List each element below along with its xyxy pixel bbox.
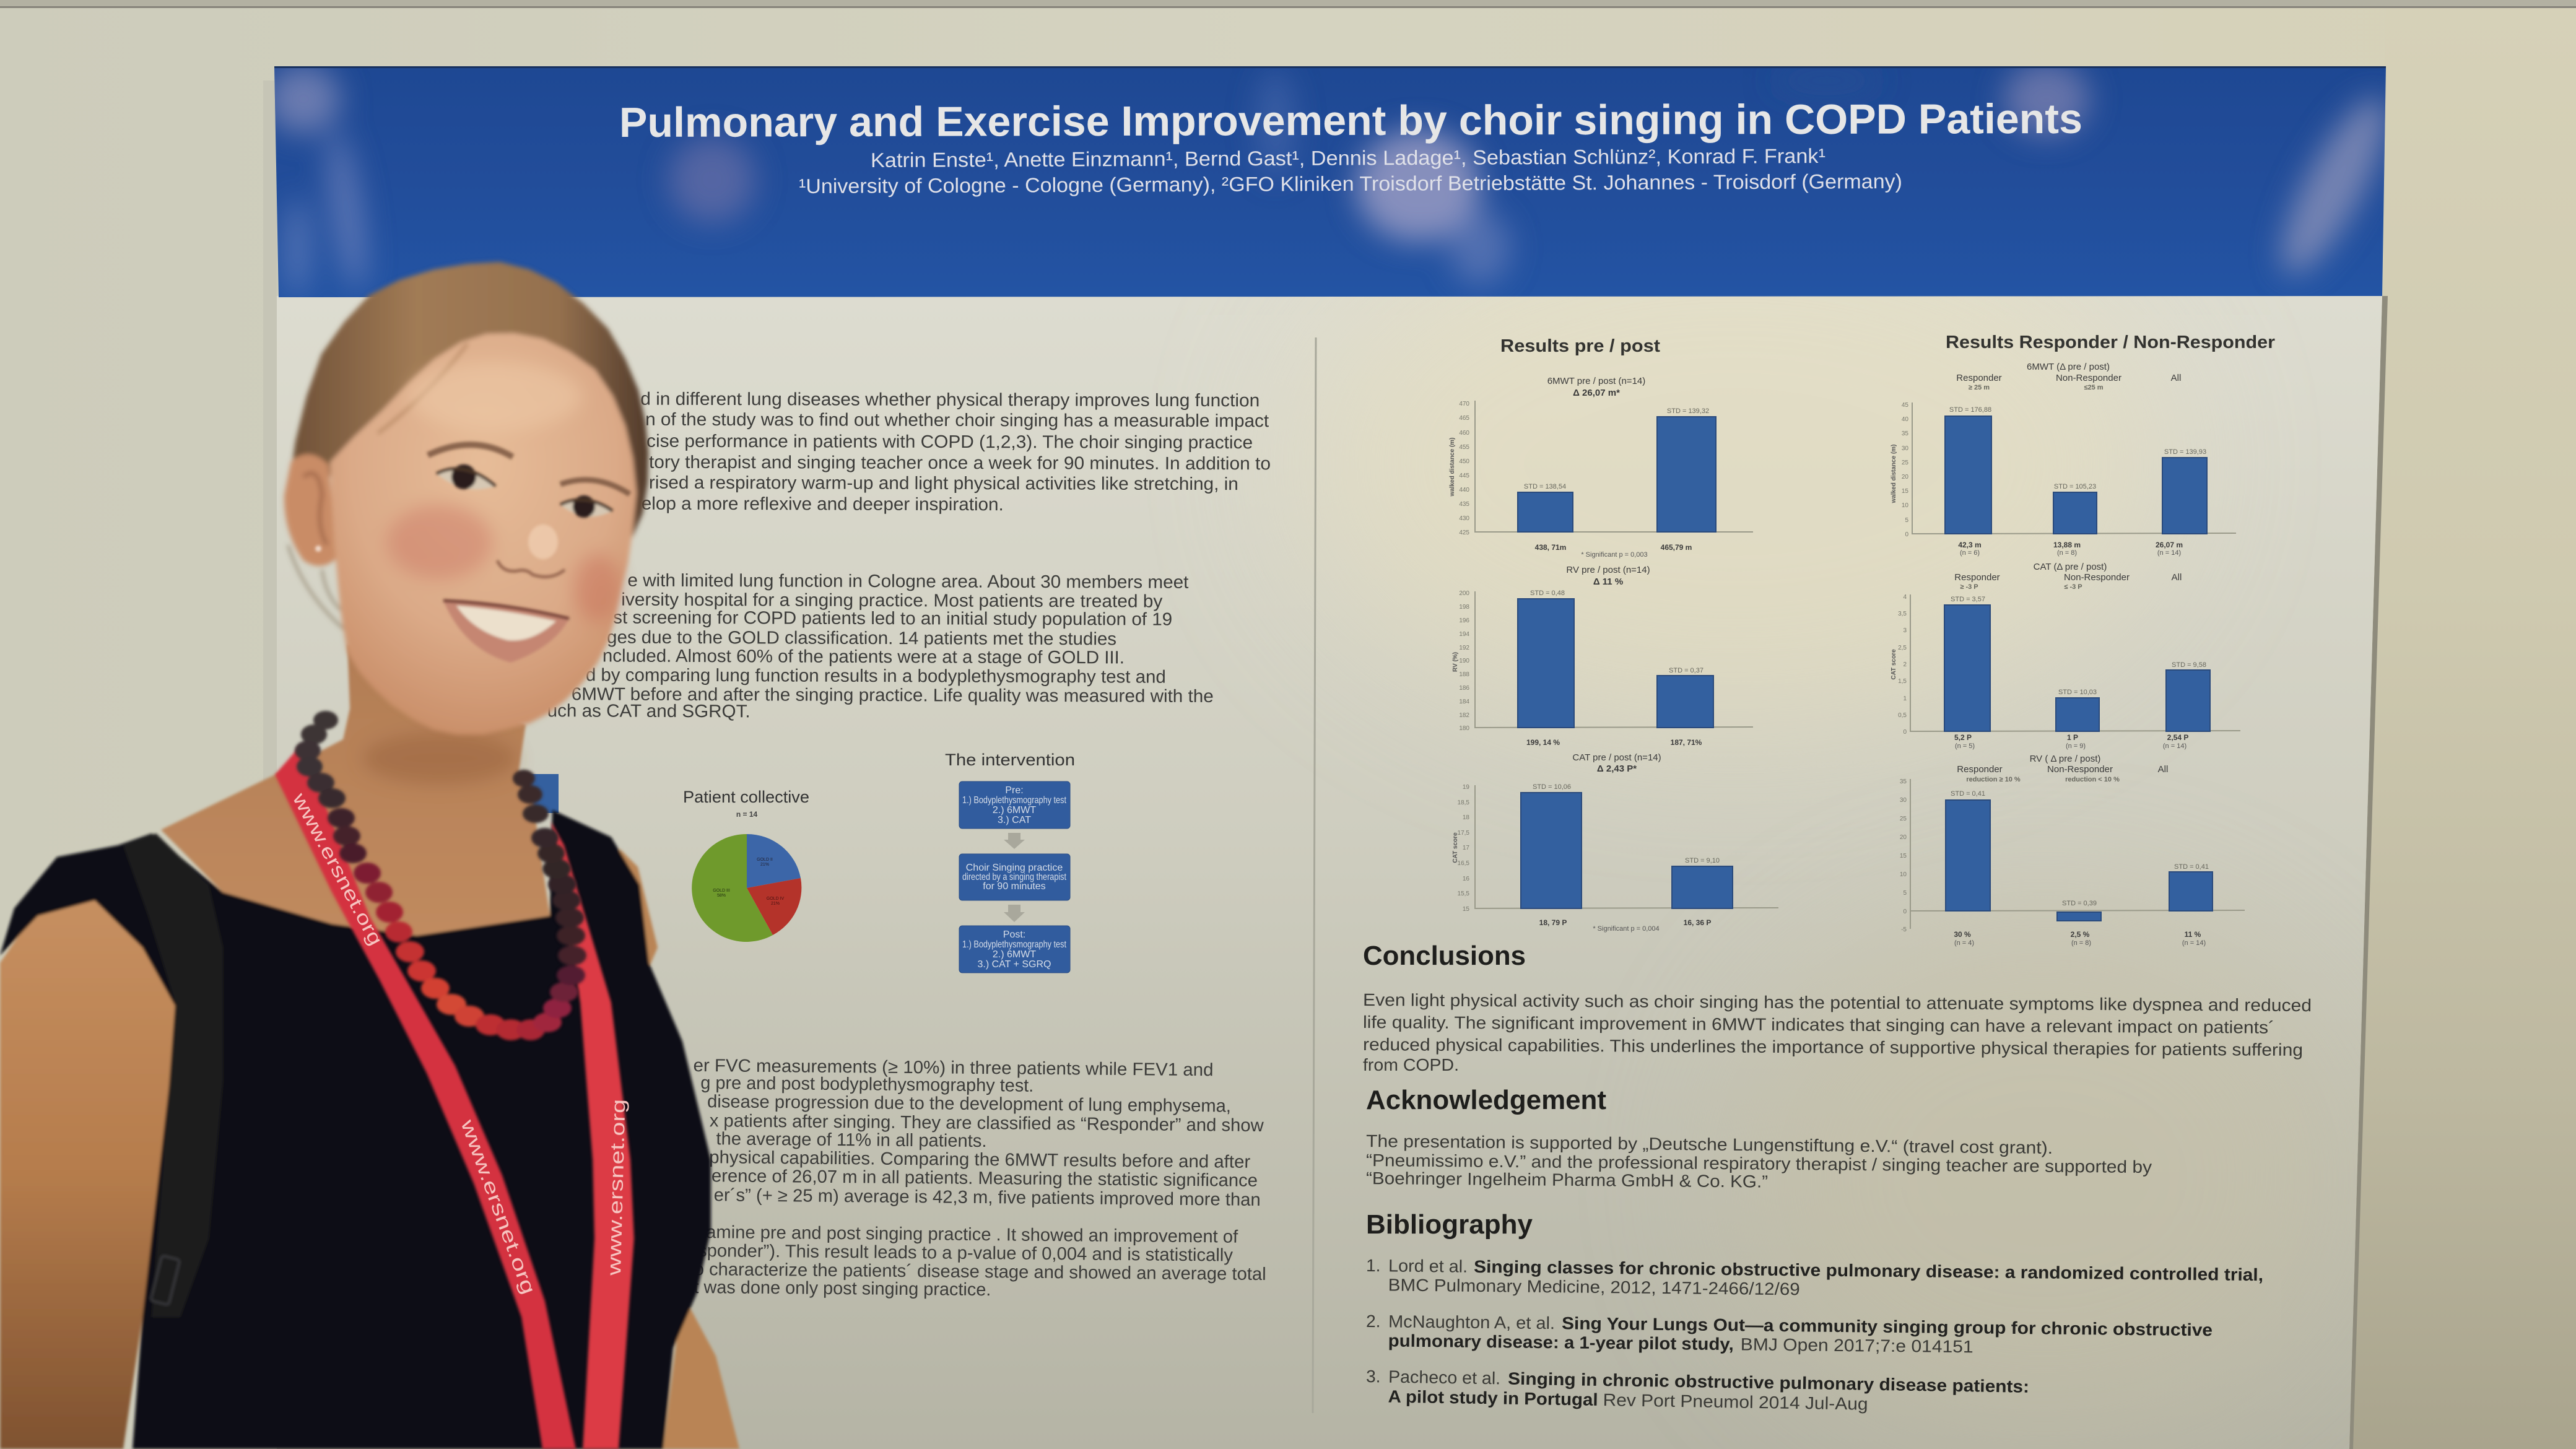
chart: 6MWT responder: Responder (1956, 373, 2002, 383)
chart: 6MWT pre/post: 438, 71m (1535, 543, 1566, 552)
chart: 6MWT responder: 20 (1902, 474, 1908, 481)
reference 1: BMC Pulmonary Medicine, 2012, 1471-2466/12/69 (1388, 1275, 1800, 1299)
step: choir practice: for 90 minutes (983, 881, 1046, 892)
chart: 6MWT responder: STD = 105,23 (2054, 483, 2096, 490)
conclusions section: Even light physical activity such as choir singing has the potential to attenuate symptoms like dyspnea and reduced (1363, 990, 2312, 1015)
patient collective pie chart (683, 788, 809, 942)
chart: RV responder: reduction ≥ 10 % (1966, 776, 2021, 783)
conclusions section (1363, 941, 2312, 1074)
reference 2: McNaughton A, et al. (1388, 1312, 1555, 1333)
results text: sponder”). This result leads to a p-value of 0,004 and is statistically (698, 1241, 1234, 1266)
chart: CAT responder: (n = 5) (1955, 742, 1975, 750)
patient collective pie chart: GOLD IV (767, 897, 785, 901)
reference 1 (1366, 1256, 2263, 1303)
reference 3 (1365, 1367, 2029, 1416)
neck and chest (161, 644, 550, 936)
results text: physical capabilities. Comparing the 6MWT results before and after (709, 1147, 1251, 1172)
hidden blue box behind person (521, 774, 559, 813)
earring (315, 546, 321, 552)
chart: CAT pre/post: STD = 10,06 (1533, 783, 1571, 791)
chart: RV responder: 0 (1903, 908, 1907, 915)
chart: RV responder: 30 (1900, 797, 1907, 804)
chart: 6MWT responder: All (2171, 373, 2181, 383)
conclusions section: life quality. The significant improvement in 6MWT indicates that singing can have a relevant impact on patients´ (1363, 1012, 2274, 1037)
methods text: uch as CAT and SGRQT. (547, 701, 751, 721)
left arm (0, 900, 178, 1449)
arrow down (1004, 833, 1025, 849)
lanyard left band: www.ersnet.org (288, 789, 387, 949)
introduction text: n of the study was to find out whether choir singing has a measurable impact (645, 410, 1269, 431)
chart: 6MWT pre/post: 460 (1459, 430, 1469, 437)
banner (266, 62, 2406, 297)
chart: CAT responder: 2,54 P (2167, 733, 2188, 742)
chart: CAT pre/post: 17 (1463, 845, 1469, 851)
chart: CAT pre/post: 18,5 (1458, 799, 1469, 806)
chart: CAT responder: STD = 3,57 (1951, 596, 1985, 603)
chart: 6MWT responder: walked distance (m) (1891, 444, 1897, 504)
chart: 6MWT responder: ≤25 m (2084, 384, 2104, 391)
patient collective pie chart: Patient collective (683, 788, 809, 806)
step: pre: 2.) 6MWT (993, 805, 1036, 816)
results text: disease progression due to the development of lung emphysema, (707, 1092, 1231, 1116)
chart: 6MWT pre/post: STD = 138,54 (1524, 483, 1566, 490)
chart: CAT responder: Responder (1954, 572, 2000, 583)
chart: RV pre/post: 200 (1459, 590, 1469, 597)
bibliography section: Bibliography (1366, 1209, 1533, 1240)
chart: CAT pre/post: 16,5 (1458, 860, 1469, 867)
column divider (1313, 337, 1316, 1413)
chart: RV responder: 25 (1900, 816, 1907, 822)
eyebrows (428, 445, 513, 457)
chart: CAT pre/post: 15,5 (1458, 890, 1469, 897)
person in foreground (0, 262, 739, 1449)
chart: 6MWT responder: 13,88 m (2053, 541, 2081, 549)
chart: RV responder: All (2158, 764, 2168, 775)
chart: CAT responder: 4 (1903, 594, 1907, 601)
chart: RV responder: (n = 14) (2182, 939, 2206, 947)
results text (691, 1056, 1268, 1302)
chart: CAT responder: STD = 9,58 (2172, 661, 2206, 669)
chart: CAT responder: (n = 14) (2163, 742, 2187, 750)
step: choir practice (959, 854, 1070, 900)
chart: RV pre/post (1452, 565, 1753, 747)
chart: 6MWT responder: STD = 176,88 (1949, 406, 1991, 414)
necklace (295, 711, 586, 1040)
chart: 6MWT responder: 26,07 m (2156, 541, 2183, 549)
methods text: 6MWT before and after the singing practice. Life quality was measured with the (572, 684, 1214, 707)
chart: CAT pre/post: 17,5 (1458, 830, 1469, 837)
chart: RV pre/post: STD = 0,48 (1530, 590, 1565, 597)
chart: RV responder (1900, 754, 2245, 947)
chart: RV pre/post: 194 (1459, 631, 1469, 638)
chart: CAT responder (1891, 562, 2240, 750)
patient collective pie chart: 58% (717, 894, 726, 898)
chart: RV responder: STD = 0,41 (2174, 863, 2209, 871)
introduction text: d in different lung diseases whether physical therapy improves lung function (640, 389, 1260, 411)
affiliations: ¹University of Cologne - Cologne (Germany), ²GFO Kliniken Troisdorf Betriebstätte St. Johannes - Troisdorf (Germany) (799, 170, 1902, 198)
chart: RV responder: STD = 0,41 (1951, 790, 1985, 798)
chart: 6MWT responder: 42,3 m (1958, 541, 1982, 549)
step: post: 2.) 6MWT (993, 949, 1036, 960)
chart: CAT responder: (n = 9) (2066, 742, 2086, 750)
chart: CAT responder: STD = 10,03 (2058, 689, 2097, 696)
acknowledgement section: “Boehringer Ingelheim Pharma GmbH & Co. KG.” (1366, 1168, 1768, 1191)
chart: CAT responder: ≥ -3 P (1960, 583, 1978, 591)
chart: RV responder: 2,5 % (2071, 930, 2090, 939)
patient collective pie chart: GOLD III (713, 889, 730, 893)
title: Pulmonary and Exercise Improvement by choir singing in COPD Patients (619, 95, 2082, 146)
methods text: st screening for COPD patients led to an initial study population of 19 (613, 608, 1172, 630)
reference 2: Sing Your Lungs Out—a community singing group for chronic obstructive (1562, 1313, 2213, 1339)
methods text: iversity hospital for a singing practice. Most patients are treated by (621, 590, 1163, 612)
conclusions section: from COPD. (1363, 1055, 1459, 1074)
patient collective pie chart: 21% (771, 902, 780, 906)
chart: RV pre/post: 187, 71% (1671, 738, 1702, 747)
chart: RV responder: RV ( Δ pre / post) (2030, 754, 2100, 764)
patient collective pie chart: GOLD II (757, 858, 773, 862)
results text: er FVC measurements (≥ 10%) in three patients while FEV1 and (693, 1056, 1214, 1080)
chart: CAT pre/post: 18, 79 P (1539, 918, 1567, 927)
step: pre: 3.) CAT (998, 815, 1031, 825)
hair wisp across forehead (378, 344, 468, 433)
methods text: ges due to the GOLD classification. 14 patients met the studies (607, 628, 1116, 649)
chart: 6MWT responder: ≥ 25 m (1969, 384, 1990, 391)
chart: RV responder: (n = 8) (2071, 939, 2091, 947)
chart: RV responder: (n = 4) (1954, 939, 1974, 947)
reference 3: Singing in chronic obstructive pulmonary disease patients: (1508, 1369, 2029, 1396)
introduction text: cise performance in patients with COPD (1,2,3). The choir singing practice (646, 432, 1253, 453)
chart: 6MWT pre/post: 435 (1459, 501, 1469, 508)
chart: CAT responder: 1 (1903, 695, 1907, 702)
bag strap (123, 833, 223, 1317)
chart: RV responder: 35 (1900, 778, 1907, 785)
chart: CAT responder: Non-Responder (2064, 572, 2130, 583)
reference 3: A pilot study in Portugal (1388, 1387, 1598, 1409)
chart: RV pre/post: 198 (1459, 604, 1469, 611)
chart: 6MWT responder: STD = 139,93 (2164, 448, 2206, 456)
chart: 6MWT responder: 5 (1905, 517, 1908, 524)
methods text (547, 570, 1214, 723)
chart: 6MWT responder: 40 (1902, 416, 1908, 423)
chart: 6MWT pre/post (1449, 376, 1753, 559)
chart: 6MWT responder: 6MWT (Δ pre / post) (2027, 362, 2110, 372)
methods text: ncluded. Almost 60% of the patients were at a stage of GOLD III. (603, 646, 1125, 668)
chart: CAT pre/post: * Significant p = 0,004 (1593, 925, 1660, 933)
chart: CAT responder: 2,5 (1898, 645, 1907, 651)
lanyard left band (275, 745, 576, 1449)
acknowledgement section: “Pneumissimo e.V.” and the professional respiratory therapist / singing teacher are supported by (1366, 1151, 2152, 1177)
chart: 6MWT responder: 15 (1902, 488, 1908, 495)
acknowledgement section: Acknowledgement (1366, 1085, 1606, 1115)
chart: CAT pre/post: CAT pre / post (n=14) (1572, 752, 1661, 763)
step: pre: Pre: (1005, 785, 1024, 796)
chart: 6MWT responder: 25 (1902, 459, 1908, 466)
chart: 6MWT pre/post: 440 (1459, 487, 1469, 494)
conclusions section: reduced physical capabilities. This underlines the importance of supportive physical therapies for patients suffering (1363, 1035, 2303, 1060)
chart: 6MWT pre/post: 6MWT pre / post (n=14) (1547, 376, 1645, 386)
conclusions section: Conclusions (1363, 941, 1526, 971)
step: post (959, 926, 1070, 973)
introduction text: tory therapist and singing teacher once a week for 90 minutes. In addition to (649, 453, 1271, 474)
chart: RV pre/post: 199, 14 % (1526, 738, 1560, 747)
chart: CAT responder: 3,5 (1898, 611, 1907, 617)
chart: 6MWT pre/post: STD = 139,32 (1667, 407, 1709, 415)
chart: RV responder: 20 (1900, 834, 1907, 841)
chart: 6MWT pre/post: 465 (1459, 415, 1469, 422)
chart: CAT pre/post: Δ 2,43 P* (1597, 764, 1637, 774)
introduction text: rised a respiratory warm-up and light physical activities like stretching, in (649, 473, 1238, 494)
chart: RV pre/post: 188 (1459, 671, 1469, 678)
intervention flow diagram: The intervention (945, 751, 1075, 769)
chart: 6MWT pre/post: * Significant p = 0,003 (1581, 551, 1648, 559)
chart: RV responder: STD = 0,39 (2062, 900, 2097, 907)
poster sheet (277, 204, 2382, 1449)
face (330, 333, 637, 734)
step: pre (959, 781, 1070, 829)
chart: 6MWT responder: 10 (1902, 502, 1908, 509)
chart: RV pre/post: 196 (1459, 617, 1469, 624)
reference 2: 2. (1366, 1312, 1381, 1331)
chart: CAT responder: CAT (Δ pre / post) (2034, 562, 2107, 572)
chart: CAT pre/post: 15 (1463, 906, 1469, 913)
chart: CAT responder: 3 (1903, 627, 1907, 634)
chart: 6MWT pre/post: 430 (1459, 515, 1469, 522)
acknowledgement section (1366, 1085, 2152, 1191)
step: choir practice: Choir Singing practice (966, 863, 1063, 873)
methods text: e with limited lung function in Cologne area. About 30 members meet (627, 571, 1188, 593)
chart: 6MWT pre/post: 425 (1459, 529, 1469, 536)
results text: er´s” (+ ≥ 25 m) average is 42,3 m, five patients improved more than (714, 1185, 1261, 1210)
results text: amine pre and post singing practice . It showed an improvement of (706, 1222, 1238, 1247)
chart: 6MWT responder: (n = 14) (2157, 549, 2181, 557)
step: post: Post: (1003, 929, 1025, 940)
results text: t was done only post singing practice. (694, 1277, 991, 1300)
chart: CAT responder: 1 P (2067, 733, 2078, 742)
chart: CAT pre/post: 16, 36 P (1684, 918, 1711, 927)
intervention flow diagram (945, 751, 1075, 973)
chart: RV pre/post: 182 (1459, 712, 1469, 719)
chart: CAT responder: CAT score (1891, 649, 1897, 680)
reference 2 (1366, 1312, 2213, 1359)
chart: RV pre/post: RV (%) (1452, 652, 1459, 672)
phone outline (150, 1255, 180, 1305)
bibliography section (1365, 1209, 2263, 1416)
smile (443, 601, 569, 663)
introduction text (640, 389, 1271, 515)
reference 1: Singing classes for chronic obstructive pulmonary disease: a randomized controlled trial, (1474, 1257, 2263, 1284)
chart: CAT responder: All (2172, 572, 2182, 583)
results text: the average of 11% in all patients. (716, 1129, 987, 1151)
chart: RV pre/post: RV pre / post (n=14) (1566, 565, 1650, 575)
chart: CAT responder: 0,5 (1898, 712, 1907, 719)
chart: 6MWT pre/post: 470 (1459, 401, 1469, 407)
chart: CAT responder: 5,2 P (1954, 733, 1972, 742)
chart: RV responder: reduction < 10 % (2065, 776, 2120, 783)
lanyard right band: www.ersnet.org (603, 1099, 629, 1277)
hair (291, 262, 648, 537)
chart: CAT pre/post: STD = 9,10 (1685, 857, 1720, 864)
chart: RV responder: 30 % (1954, 930, 1971, 939)
chart: 6MWT pre/post: 455 (1459, 444, 1469, 451)
chart: RV pre/post: 184 (1459, 698, 1469, 705)
chart: CAT responder: 0 (1903, 729, 1907, 736)
authors: Katrin Enste¹, Anette Einzmann¹, Bernd Gast¹, Dennis Ladage¹, Sebastian Schlünz², Konrad F. Frank¹ (871, 144, 1825, 172)
chart: 6MWT responder: (n = 6) (1960, 549, 1980, 557)
chart: 6MWT pre/post: 465,79 m (1661, 543, 1692, 552)
chart: 6MWT responder: (n = 8) (2057, 549, 2077, 557)
head (284, 262, 648, 734)
chart: CAT responder: 1,5 (1898, 678, 1907, 685)
step: post: 1.) Bodyplethysmography test (962, 939, 1066, 950)
step: choir practice: directed by a singing therapist (962, 872, 1066, 882)
step: post: 3.) CAT + SGRQ (977, 959, 1051, 970)
right arm (619, 848, 739, 1449)
chart: 6MWT responder: 35 (1902, 430, 1908, 437)
chart: 6MWT responder: 30 (1902, 445, 1908, 452)
chart: 6MWT pre/post: 445 (1459, 472, 1469, 479)
chart: 6MWT responder: 45 (1902, 402, 1908, 409)
chart: RV pre/post: 192 (1459, 645, 1469, 651)
dress (0, 810, 711, 1449)
reference 3: 3. (1366, 1367, 1381, 1386)
arrow down (1004, 905, 1025, 922)
chart: 6MWT responder (1891, 362, 2236, 557)
results text: g pre and post bodyplethysmography test. (700, 1073, 1033, 1096)
patient collective pie chart: 21% (760, 863, 769, 867)
chart: RV responder: Non-Responder (2047, 764, 2113, 775)
chart: RV responder: 11 % (2185, 930, 2201, 939)
reference 1: Lord et al. (1388, 1256, 1468, 1276)
left eye (437, 464, 495, 489)
ear (284, 455, 337, 566)
chart: RV pre/post: 190 (1459, 658, 1469, 664)
chart: CAT pre/post: 16 (1463, 876, 1469, 882)
results text: x patients after singing. They are classified as “Responder” and show (710, 1111, 1264, 1136)
reference 3: Rev Port Pneumol 2014 Jul-Aug (1603, 1390, 1868, 1414)
chart: RV responder: 5 (1903, 890, 1907, 897)
chart: 6MWT pre/post: 450 (1459, 458, 1469, 465)
hair strands near ear (288, 545, 347, 632)
chart: RV responder: 15 (1900, 853, 1907, 859)
heading: results responder: Results Responder / Non-Responder (1946, 333, 2275, 352)
chart: CAT responder: ≤ -3 P (2064, 583, 2082, 591)
nose (497, 524, 565, 577)
lanyard left band: www.ersnet.org (456, 1116, 540, 1297)
chart: RV pre/post: Δ 11 % (1593, 577, 1623, 587)
reference 2: pulmonary disease: a 1-year pilot study, (1388, 1331, 1734, 1354)
acknowledgement section: The presentation is supported by „Deutsche Lungenstiftung e.V.“ (travel cost grant). (1366, 1131, 2053, 1157)
chart: 6MWT responder: Non-Responder (2056, 373, 2121, 383)
methods text: d by comparing lung function results in a bodyplethysmography test and (586, 665, 1166, 687)
reference 1: 1. (1366, 1256, 1381, 1275)
right eye (560, 495, 612, 518)
chart: 6MWT pre/post: Δ 26,07 m* (1573, 388, 1620, 398)
results text: o characterize the patients´ disease stage and showed an average total (694, 1260, 1266, 1284)
chart: RV pre/post: STD = 0,37 (1669, 667, 1704, 674)
reference 3: Pacheco et al. (1388, 1367, 1500, 1388)
results text: erence of 26,07 m in all patients. Measuring the statistic significance (711, 1166, 1258, 1191)
chart: 6MWT responder: 0 (1905, 531, 1908, 538)
chart: CAT pre/post: 19 (1463, 784, 1469, 791)
chart: CAT pre/post: 18 (1463, 814, 1469, 821)
chart: CAT pre/post: CAT score (1452, 832, 1459, 863)
chart: RV pre/post: 186 (1459, 685, 1469, 692)
lanyard right band (551, 822, 634, 1449)
heading: results pre/post: Results pre / post (1500, 336, 1660, 356)
chart: CAT responder: 2 (1903, 661, 1907, 668)
chart: RV pre/post: 180 (1459, 725, 1469, 732)
chart: RV responder: 10 (1900, 871, 1907, 878)
step: pre: 1.) Bodyplethysmography test (962, 795, 1066, 806)
reference 2: BMJ Open 2017;7:e 014151 (1741, 1334, 1973, 1356)
chart: CAT pre/post (1452, 752, 1778, 933)
chart: RV responder: -5 (1901, 926, 1907, 933)
chart: 6MWT pre/post: walked distance (m) (1449, 437, 1456, 497)
chart: RV responder: Responder (1957, 764, 2003, 775)
introduction text: elop a more reflexive and deeper inspiration. (642, 494, 1004, 515)
patient collective pie chart: n = 14 (736, 810, 758, 819)
